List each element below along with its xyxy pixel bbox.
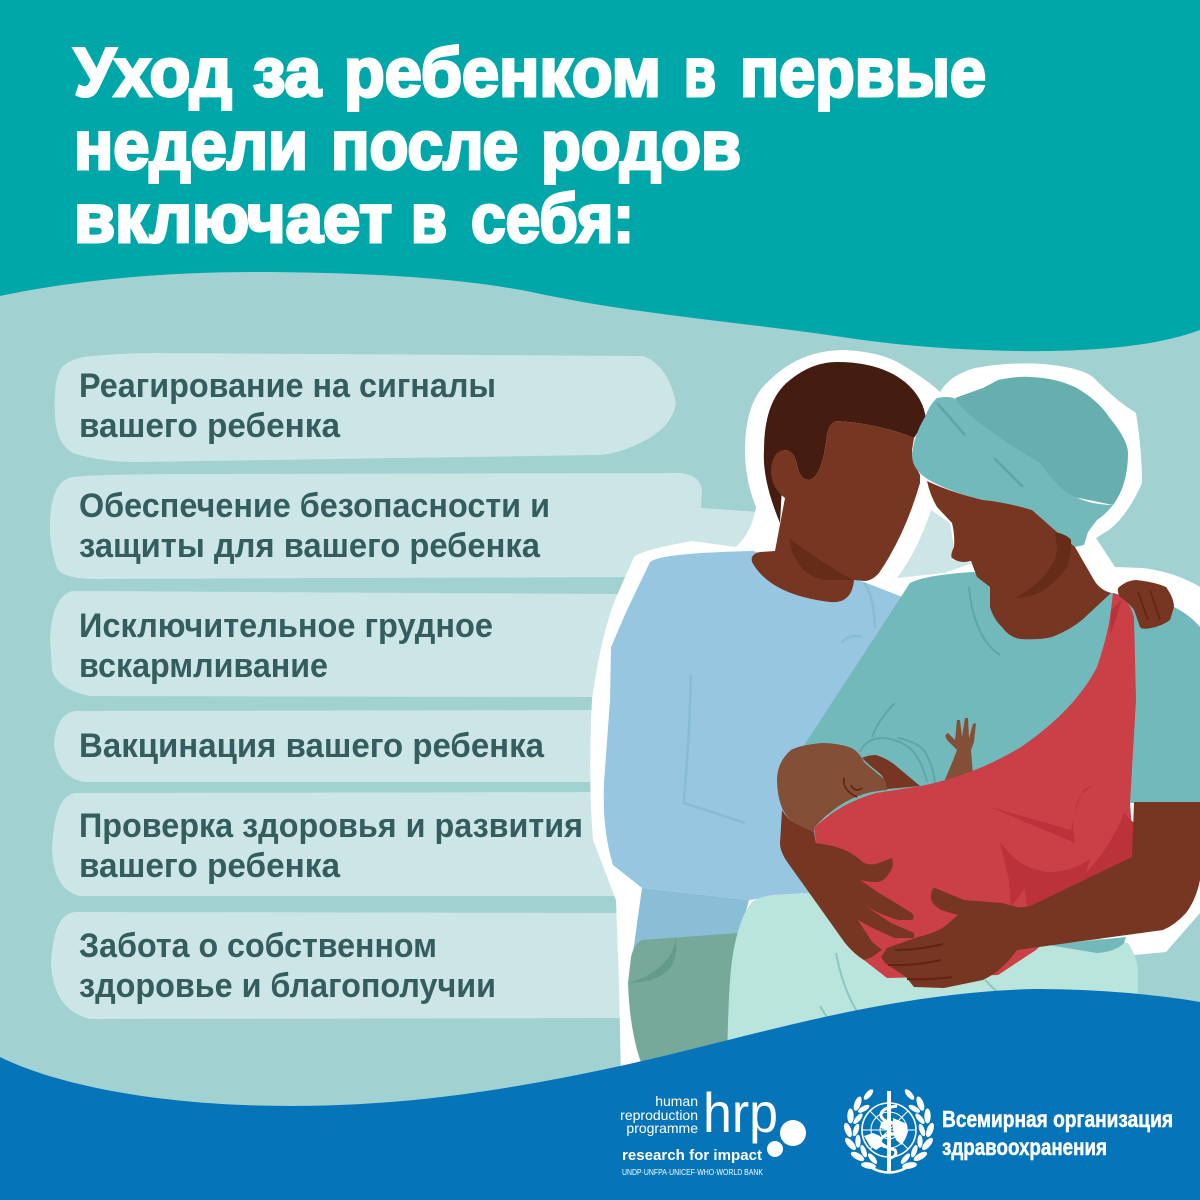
programme name: programme [626, 1120, 698, 1136]
item 2: safety and protection: Обеспечение безопасности и [79, 487, 550, 525]
sling folds [990, 597, 1134, 907]
item 1: responding to cues [55, 353, 676, 462]
logo: HRP [620, 1081, 806, 1177]
logo: WHO name: здравоохранения [942, 1134, 1107, 1160]
sling [814, 593, 1136, 978]
man neck shadow [789, 538, 853, 580]
man [604, 362, 926, 1075]
hand on shoulder [1118, 580, 1174, 629]
woman face and neck [927, 481, 1111, 639]
title [74, 34, 986, 257]
item 4: vaccination [54, 710, 660, 782]
item 2: safety and protection [50, 473, 760, 579]
shirt hem behind arm [1048, 937, 1126, 953]
finger lines [1138, 590, 1160, 620]
programme name: human [655, 1093, 698, 1109]
list of care items [50, 353, 760, 1019]
pale panel seen between the heads [897, 510, 973, 578]
item 3: exclusive breastfeeding [50, 591, 660, 697]
item 3: exclusive breastfeeding: Исключительное грудное [79, 607, 493, 645]
man lower shirt shade [632, 888, 749, 960]
man face and neck [752, 421, 920, 602]
title: в [684, 34, 716, 111]
item 4: vaccination: Вакцинация вашего ребенка [79, 727, 545, 765]
man hair [764, 362, 926, 523]
header wave band [0, 0, 1200, 351]
hrp dots [767, 1120, 806, 1157]
hrp wordmark: hrp [703, 1081, 778, 1144]
logo: WHO emblem [842, 1088, 936, 1173]
tagline: research for impact [622, 1147, 762, 1164]
item 5: health and development checks: вашего ребенка [79, 847, 341, 885]
trouser creases [820, 953, 1000, 1025]
illustration: parents with baby [590, 350, 1200, 1100]
title: после [331, 107, 518, 184]
item 6: self care: Забота о собственном [79, 927, 437, 965]
baby shoulder [862, 755, 920, 789]
item 5: health and development checks: Проверка здоровья и развития [79, 807, 583, 845]
programme name: reproduction [620, 1107, 698, 1123]
head wrap [955, 377, 1128, 505]
baby eye [844, 778, 862, 797]
title: себя: [471, 180, 634, 257]
title: ребенком [344, 34, 661, 111]
white halo outline [590, 350, 1200, 1080]
title: недели [74, 107, 308, 184]
man shirt wrinkles [684, 583, 875, 823]
woman shirt [803, 572, 1200, 900]
title: Уход [74, 34, 232, 111]
item 5: health and development checks [52, 792, 660, 896]
continents [864, 1118, 908, 1150]
woman [777, 377, 1200, 988]
globe grid [862, 1103, 916, 1157]
trouser pocket [629, 937, 676, 983]
logo: WHO name [942, 1106, 1173, 1160]
title: в [411, 180, 447, 257]
woman neck shadow [1015, 532, 1071, 598]
arm cradling the baby [780, 810, 914, 960]
item 6: self care: здоровье и благополучии [79, 967, 496, 1005]
man trousers [628, 933, 738, 1075]
baby head [777, 743, 889, 832]
ribbon [872, 1168, 906, 1172]
item 3: exclusive breastfeeding: вскармливание [79, 647, 328, 685]
man shirt [604, 551, 910, 905]
head wrap band [912, 397, 1113, 547]
laurel left [842, 1088, 879, 1170]
knuckle lines [888, 944, 952, 979]
arm and hand supporting the baby [881, 802, 1200, 988]
title: родов [541, 107, 741, 184]
item 2: safety and protection: защиты для вашего ребенка [79, 527, 541, 565]
item 1: responding to cues: Реагирование на сигналы [79, 367, 496, 405]
title: первые [740, 34, 986, 111]
laurel right [899, 1088, 936, 1170]
footer wave band [0, 989, 1200, 1200]
woman's trousers [727, 893, 1138, 1100]
title: включает [74, 180, 392, 257]
programme name [620, 1093, 698, 1136]
title: за [253, 34, 322, 111]
item 6: self care [51, 912, 660, 1019]
baby arm and hand [944, 718, 976, 782]
wrap creases [937, 403, 1023, 487]
shirt wrinkles [860, 587, 1000, 783]
staff and serpent [887, 1091, 891, 1173]
item 1: responding to cues: вашего ребенка [79, 407, 341, 445]
partner list: UNDP·UNFPA·UNICEF·WHO·WORLD BANK [622, 1168, 764, 1177]
